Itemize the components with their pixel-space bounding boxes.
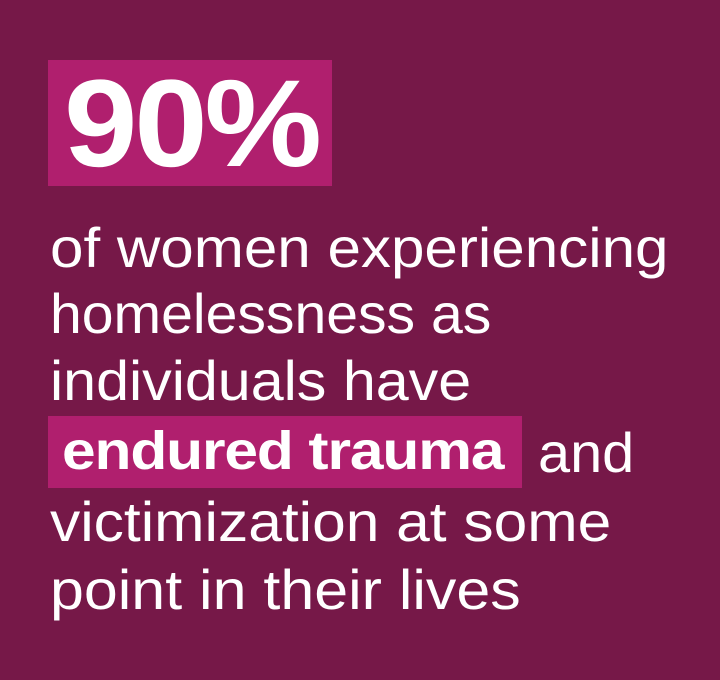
text line 1: of women experiencing <box>50 216 669 279</box>
text line 6: point in their lives <box>50 558 521 621</box>
text line 2: homelessness as <box>50 282 491 345</box>
text line 5: victimization at some <box>50 490 611 553</box>
headline: 90%: 90% <box>64 55 319 193</box>
highlighted text: endured trauma: endured trauma <box>62 421 503 481</box>
text line 3: individuals have <box>50 349 471 412</box>
text: and: and <box>538 421 634 484</box>
highlight box <box>48 416 522 488</box>
headline stat box <box>48 60 332 186</box>
